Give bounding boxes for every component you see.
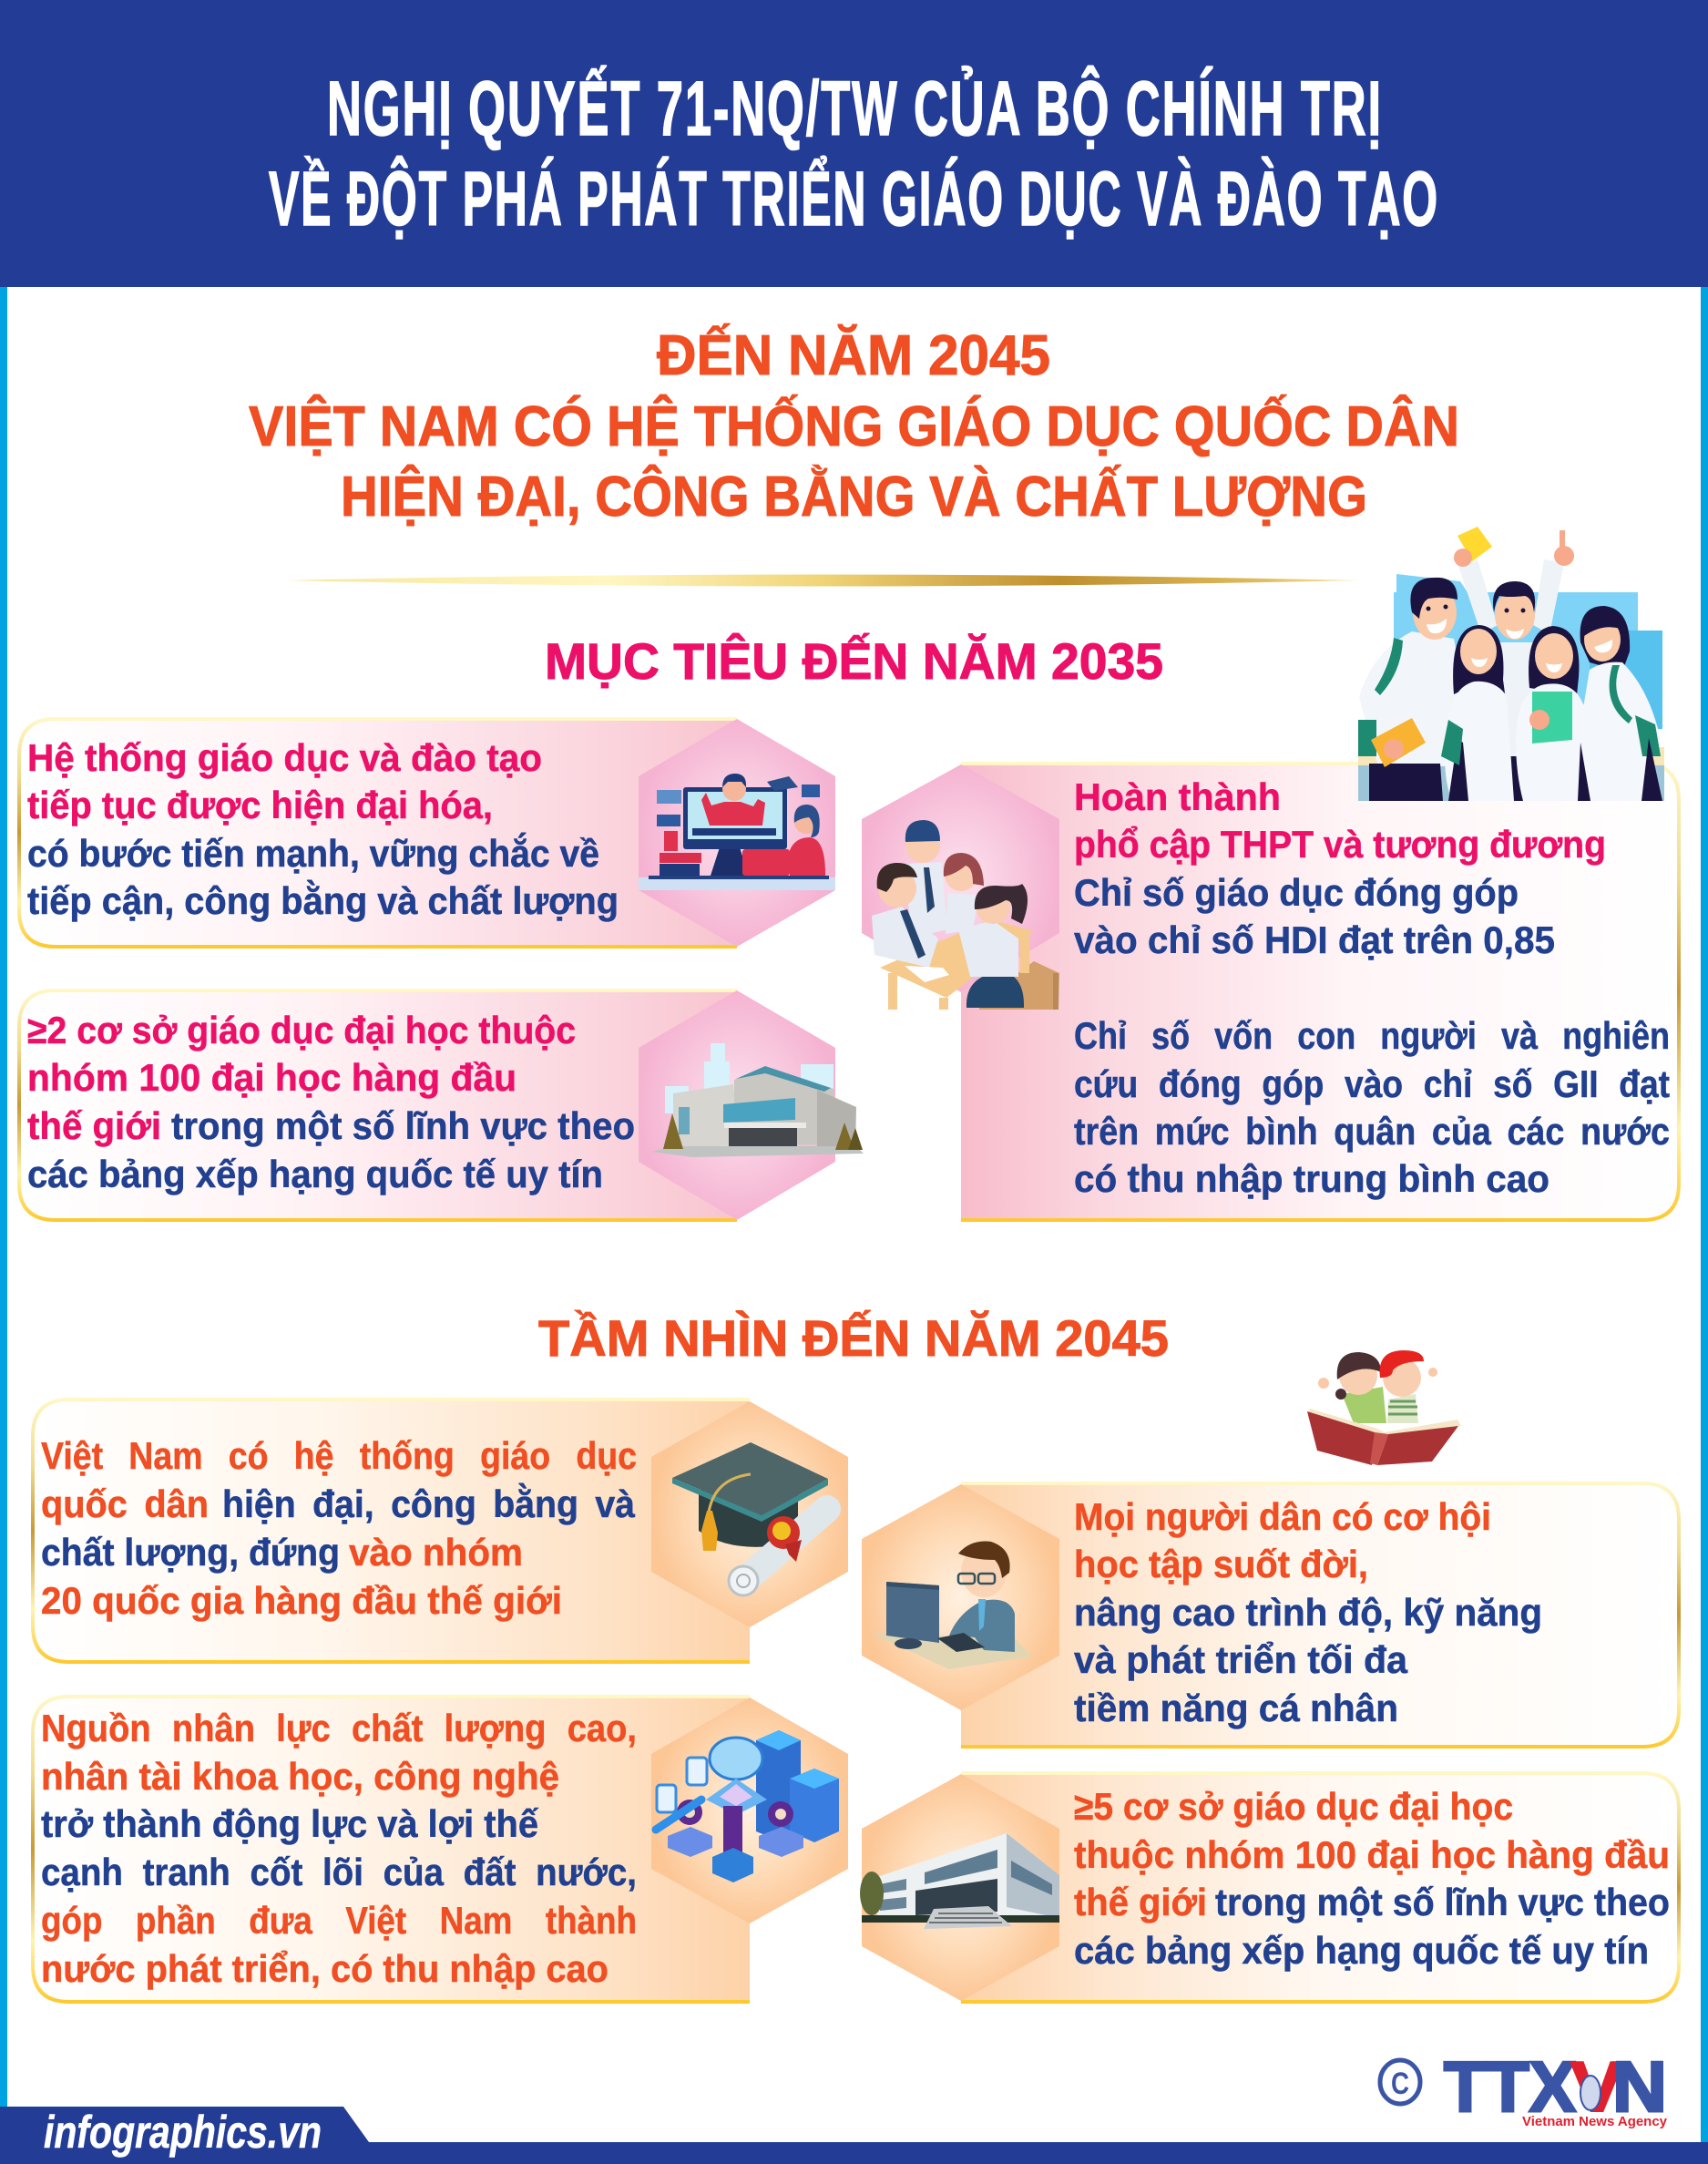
panel: modernised education system [19,719,835,947]
footer bar [0,2107,1708,2164]
text: upper secondary universalisation and indices: vào chỉ số HDI đạt trên 0,85 [1074,918,1555,961]
heading: goals to 2035: MỤC TIÊU ĐẾN NĂM 2035 [545,632,1163,690]
text: modernised education system [27,736,619,922]
logo: TTXVN copyright: V [1570,2046,1623,2127]
icon: graduation cap and diploma [672,1442,828,1595]
boy with raised hands [1454,527,1574,801]
text: high-quality human resources: nước phát triển, có thu nhập cao [41,1947,609,1990]
text: five top-100 universities: các bảng xếp hạng quốc tế uy tín [1074,1929,1649,1972]
text: high-quality human resources: cạnh tranh cốt lõi của đất nước, [41,1851,637,1893]
text: five top-100 universities: ≥5 cơ sở giáo dục đại học [1074,1785,1513,1828]
logo: TTXVN copyright: TTX [1444,2046,1576,2127]
panel: high-quality human resources [33,1697,848,2002]
text: upper secondary universalisation and indices: có thu nhập trung bình cao [1074,1157,1549,1200]
text: two top-100 universities: trong một số lĩnh vực theo [171,1104,635,1147]
text: two top-100 universities: các bảng xếp hạng quốc tế uy tín [27,1153,603,1195]
text: top 20 countries: 20 quốc gia hàng đầu thế giới [41,1579,562,1622]
text: top 20 countries [41,1434,637,1622]
heading: vision to 2045: TẦM NHÌN ĐẾN NĂM 2045 [538,1309,1169,1367]
icon: man at computer [872,1542,1031,1669]
text: upper secondary universalisation and indices: Chỉ số giáo dục đóng góp [1074,871,1519,914]
text: two top-100 universities: nhóm 100 đại học hàng đầu [27,1056,516,1099]
text: lifelong learning: nâng cao trình độ, kỹ năng [1074,1591,1542,1634]
text: upper secondary universalisation and indices [1074,775,1670,1200]
text: modernised education system: có bước tiến mạnh, vững chắc về [27,831,599,875]
text: modernised education system: tiếp tục được hiện đại hóa, [27,784,493,826]
text: modernised education system: tiếp cận, công bằng và chất lượng [27,878,619,922]
illustration: group of students [1358,527,1664,801]
logo: TTXVN copyright [1380,2046,1668,2129]
panel: top 20 countries [33,1400,848,1662]
text: top 20 countries: chất lượng, đứng [41,1531,340,1574]
left cyan border [0,287,7,2146]
text: modernised education system: Hệ thống giáo dục và đào tạo [27,736,542,779]
text: high-quality human resources: góp phần đưa Việt Nam thành [41,1899,637,1942]
text: top 20 countries: hiện đại, công bằng và [222,1482,636,1525]
icon: students studying at table [872,820,1059,1010]
icon: online teacher [639,774,835,890]
text: five top-100 universities [1074,1785,1670,1972]
header band with title [0,0,1708,287]
text: top 20 countries: quốc dân [41,1482,209,1525]
text: high-quality human resources: Nguồn nhân lực chất lượng cao, [41,1707,637,1749]
main heading 2045: HIỆN ĐẠI, CÔNG BẰNG VÀ CHẤT LƯỢNG [341,466,1367,528]
text: five top-100 universities: trong một số lĩnh vực theo [1215,1881,1670,1923]
main heading 2045: ĐẾN NĂM 2045 [657,324,1050,387]
right cyan border [1701,287,1708,2146]
girl in the middle left [1441,625,1514,801]
text: top 20 countries: vào nhóm [349,1531,523,1574]
text: upper secondary universalisation and indices: Hoàn thành [1074,775,1281,818]
text: top 20 countries: Việt Nam có hệ thống giáo dục [41,1434,637,1477]
girl on the right [1580,606,1662,801]
text: lifelong learning: Mọi người dân có cơ hội [1074,1495,1491,1538]
text: five top-100 universities: thế giới [1074,1881,1207,1923]
text: upper secondary universalisation and indices: phổ cập THPT và tương đương [1074,823,1606,866]
panel: lifelong learning [862,1483,1679,1747]
panel: upper secondary universalisation and indices [862,764,1679,1220]
main heading 2045: VIỆT NAM CÓ HỆ THỐNG GIÁO DỤC QUỐC DÂN [249,395,1459,458]
text: lifelong learning: học tập suốt đời, [1074,1543,1368,1585]
icon: technology and brain [656,1730,839,1882]
footer bar: infographics.vn [44,2107,322,2158]
icon: children reading a red book [1307,1350,1461,1465]
text: lifelong learning: và phát triển tối đa [1074,1638,1408,1681]
logo: TTXVN copyright: Vietnam News Agency [1522,2114,1668,2129]
text: five top-100 universities: thuộc nhóm 100 đại học hàng đầu [1074,1833,1670,1876]
text: high-quality human resources: nhân tài khoa học, công nghệ [41,1755,559,1798]
text: lifelong learning: tiềm năng cá nhân [1074,1687,1398,1729]
icon: modern university building [860,1833,1059,1929]
text: high-quality human resources [41,1707,637,1990]
main heading 2045 [249,324,1459,528]
girl in the middle with green book [1516,626,1592,801]
icon: university building with skyline [651,1043,864,1157]
panel: two top-100 universities [19,990,864,1220]
text: lifelong learning [1074,1495,1542,1729]
text: two top-100 universities: thế giới [27,1104,161,1147]
boy with backpack and book [1358,578,1465,801]
text: two top-100 universities [27,1009,635,1195]
logo: TTXVN copyright: N [1612,2046,1667,2127]
panel: five top-100 universities [860,1773,1679,2002]
text: high-quality human resources: trở thành động lực và lợi thế [41,1802,539,1845]
logo: TTXVN copyright: C [1391,2067,1409,2101]
text: two top-100 universities: ≥2 cơ sở giáo dục đại học thuộc [27,1009,576,1051]
